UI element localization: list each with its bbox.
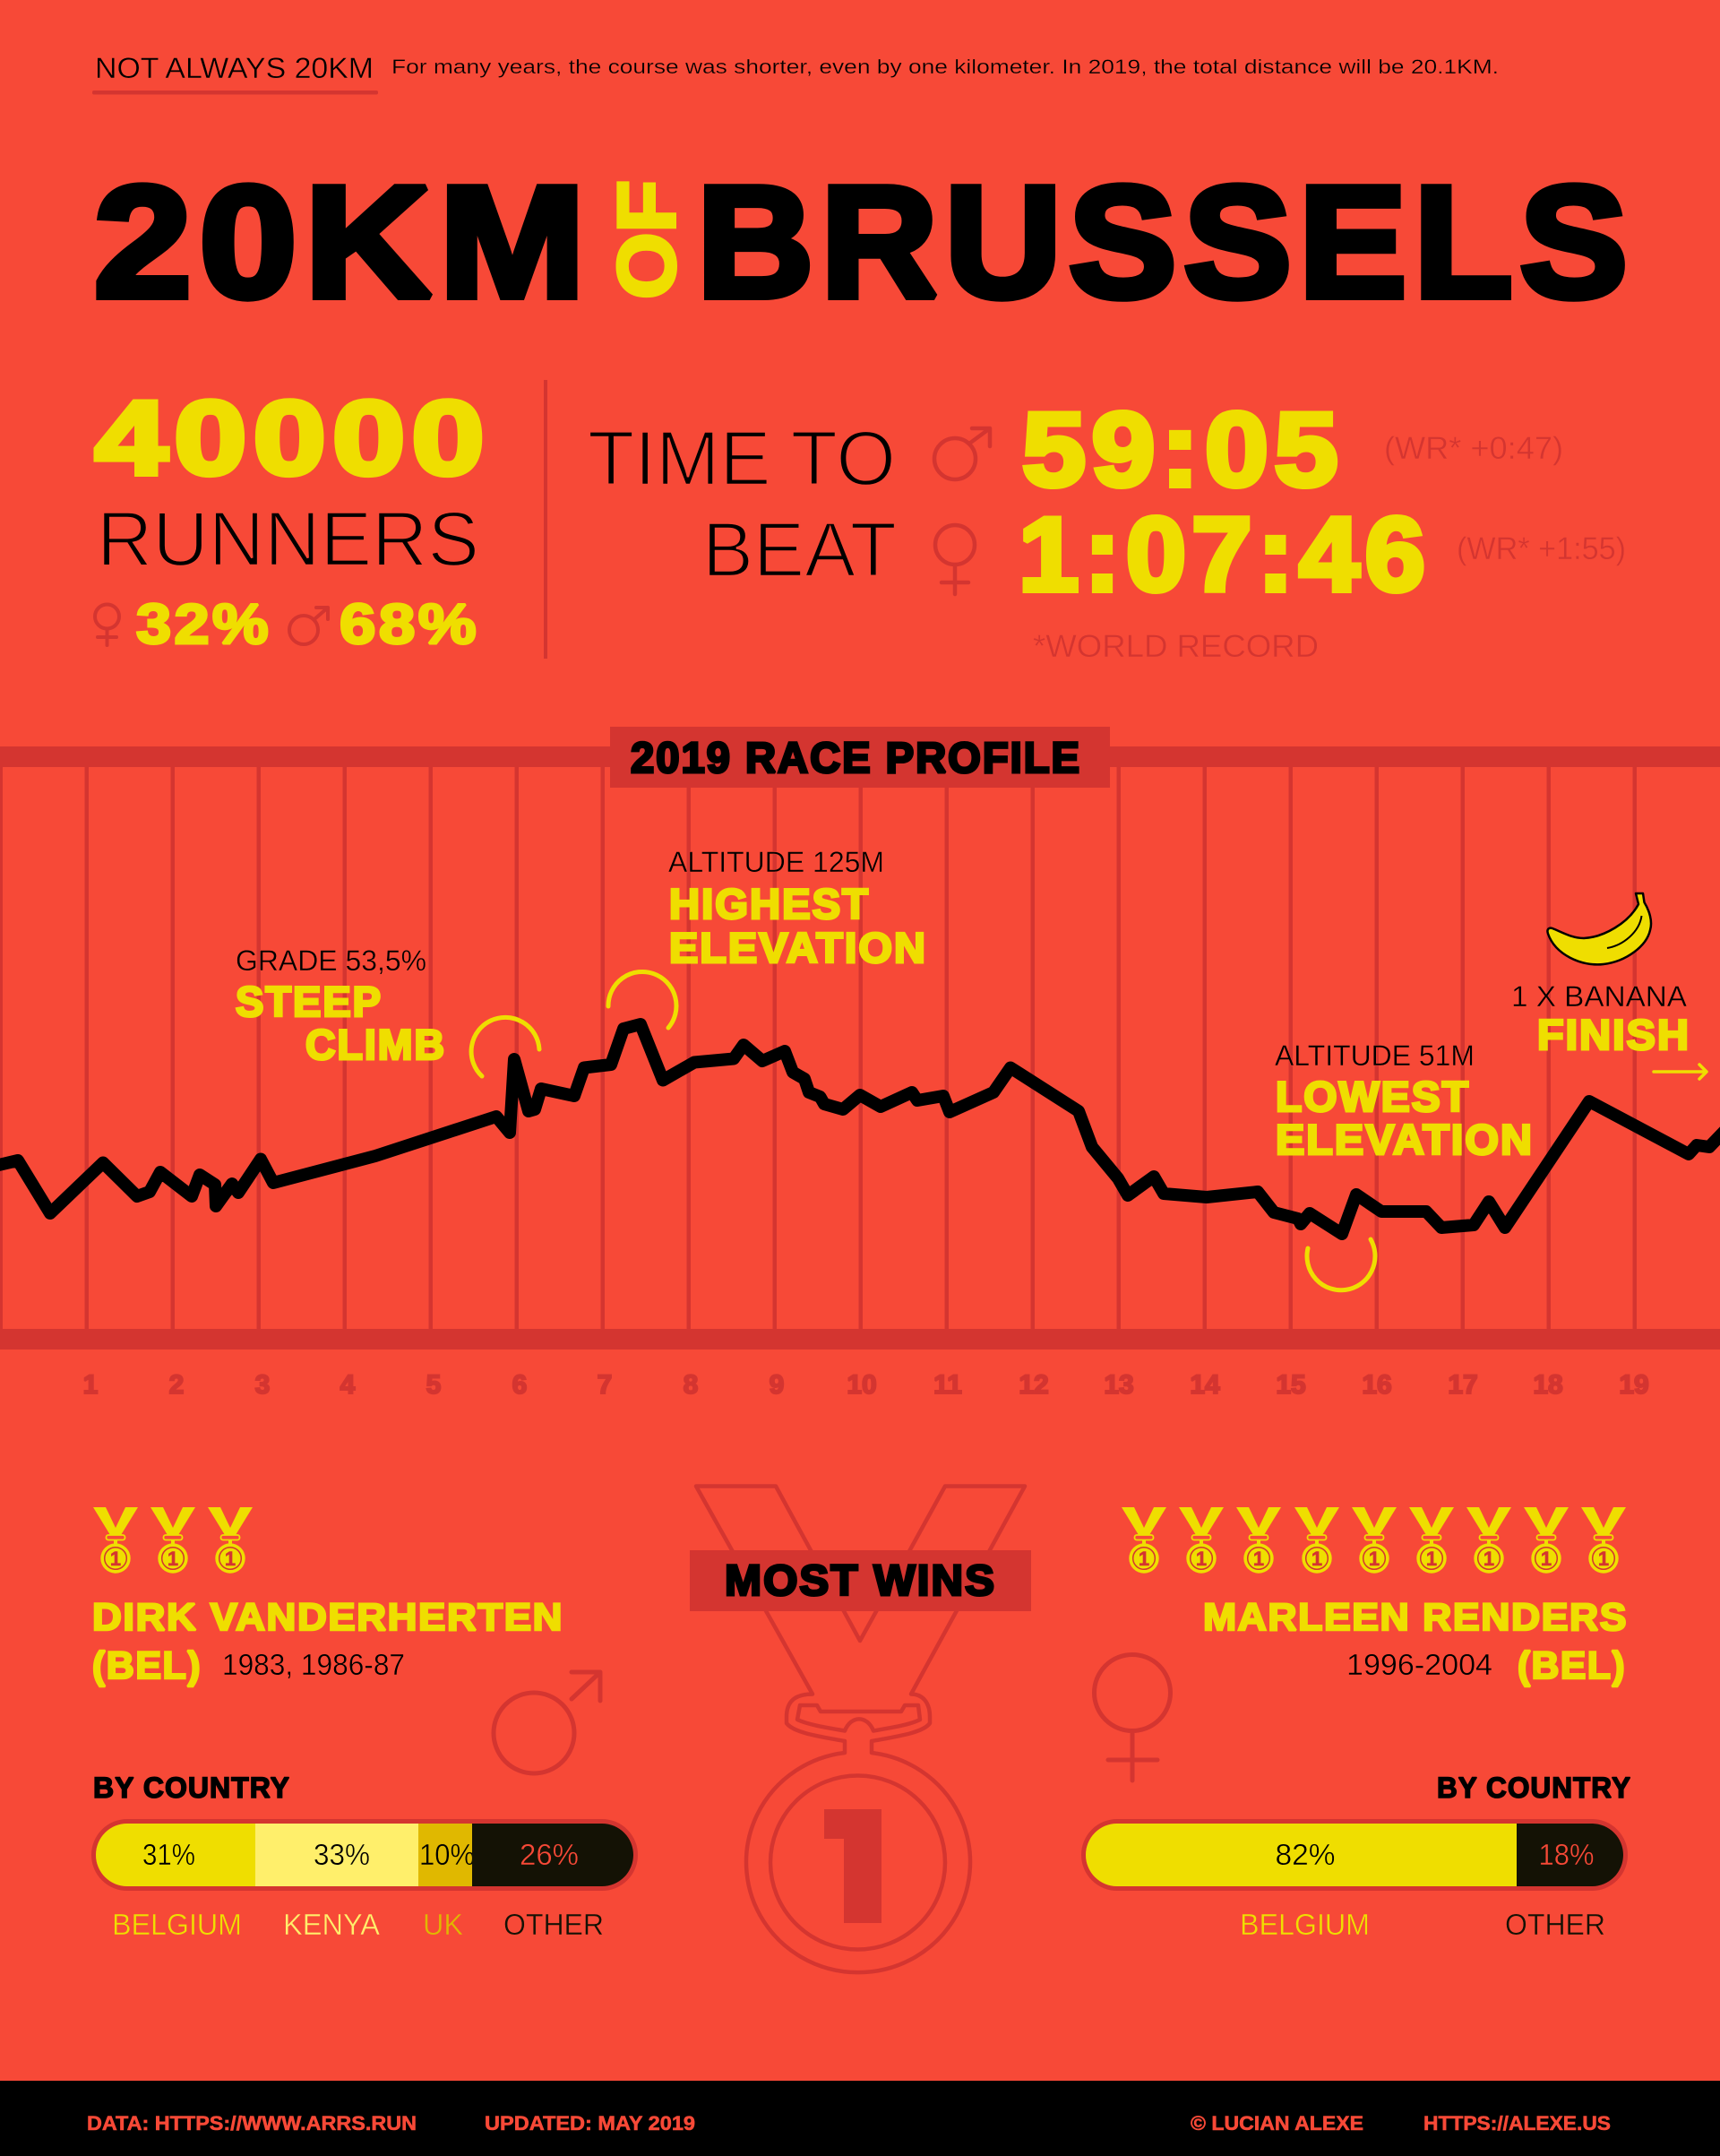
- men bar legend: UK: [423, 1908, 463, 1941]
- medals: 3 wins: 1: [168, 1548, 178, 1570]
- kilometre axis labels: 7: [598, 1370, 612, 1400]
- men bar legend: [112, 1908, 604, 1941]
- panel: runners: [95, 379, 491, 656]
- time to label: TIME TO: [588, 416, 896, 502]
- male record gap: (WR* +0:47): [1384, 431, 1563, 466]
- medals: 9 wins: 1: [1139, 1548, 1149, 1570]
- kilometre axis labels: 11: [933, 1370, 962, 1400]
- medals: 3 wins: 1: [110, 1548, 121, 1570]
- title word BRUSSELS: BRUSSELS: [697, 153, 1635, 331]
- icon: banana: [1547, 893, 1651, 964]
- medals: 9 wins: 1: [1541, 1548, 1552, 1570]
- callout: finish: FINISH: [1537, 1011, 1690, 1058]
- elevation line: [0, 1024, 1720, 1234]
- title word OF: OF: [602, 180, 692, 299]
- kilometre axis labels: 14: [1190, 1370, 1220, 1400]
- chart frame top: [0, 746, 1720, 767]
- circle marker: steep climb: [471, 1017, 539, 1076]
- men country bar: 31%: [142, 1838, 195, 1871]
- world record footnote: *WORLD RECORD: [1033, 629, 1319, 664]
- medals: 9 wins: [1122, 1507, 1626, 1574]
- men country bar: 33%: [314, 1838, 370, 1871]
- site: HTTPS://ALEXE.US: [1423, 2112, 1611, 2134]
- callout: steep climb: GRADE 53,5%: [236, 944, 426, 977]
- kilometre axis labels: 1: [83, 1370, 98, 1400]
- icon: female small: [95, 604, 119, 645]
- callout: lowest elevation: LOWEST: [1276, 1073, 1470, 1120]
- panel: men: [92, 1507, 636, 1941]
- medal clasp: [797, 1705, 920, 1731]
- men winner years: 1983, 1986-87: [222, 1648, 405, 1681]
- medals: 3 wins: 1: [225, 1548, 236, 1570]
- callout: lowest elevation: [1275, 1039, 1534, 1163]
- title: [94, 153, 1635, 331]
- callout: finish: [1511, 980, 1690, 1058]
- women winner country: (BEL): [1518, 1644, 1626, 1687]
- icon: female: [935, 525, 975, 594]
- women country bar: 82%: [1276, 1838, 1335, 1871]
- medals: 9 wins: 1: [1426, 1548, 1437, 1570]
- icon: male small: [289, 608, 328, 644]
- kilometre axis labels: 18: [1533, 1370, 1563, 1400]
- author: © LUCIAN ALEXE: [1191, 2112, 1363, 2134]
- kilometre axis labels: 17: [1448, 1370, 1478, 1400]
- kilometre axis labels: 12: [1019, 1370, 1049, 1400]
- medals: 9 wins: 1: [1253, 1548, 1264, 1570]
- medal inner ring: [770, 1776, 945, 1950]
- medals: 9 wins: 1: [1196, 1548, 1207, 1570]
- kilometre axis labels: 6: [512, 1370, 527, 1400]
- kilometre axis labels: 19: [1619, 1370, 1649, 1400]
- medal outline: [696, 1486, 1025, 1972]
- heading: most wins: MOST WINS: [725, 1557, 996, 1605]
- men bar legend: KENYA: [283, 1908, 380, 1941]
- women bar legend: BELGIUM: [1240, 1908, 1370, 1941]
- men by country heading: BY COUNTRY: [93, 1772, 290, 1804]
- women by country heading: BY COUNTRY: [1437, 1772, 1631, 1804]
- kilometre axis labels: 2: [169, 1370, 184, 1400]
- updated: UPDATED: MAY 2019: [485, 2112, 695, 2134]
- men bar legend: OTHER: [503, 1908, 604, 1941]
- chart title: 2019 RACE PROFILE: [631, 735, 1081, 782]
- circle marker: lowest: [1307, 1239, 1375, 1290]
- men winner name: DIRK VANDERHERTEN: [92, 1596, 563, 1639]
- beat label: BEAT: [702, 507, 897, 593]
- callout: steep climb: STEEP: [236, 978, 383, 1025]
- women country bar: 18%: [1539, 1838, 1595, 1871]
- callout: lowest elevation: ELEVATION: [1276, 1116, 1534, 1163]
- kilometre axis labels: 16: [1362, 1370, 1392, 1400]
- callout: highest elevation: ALTITUDE 125M: [668, 846, 884, 878]
- men country bar: 26%: [520, 1838, 579, 1871]
- icon: big female: [1095, 1654, 1170, 1781]
- kilometre axis labels: 9: [770, 1370, 784, 1400]
- callout: finish: 1 X BANANA: [1511, 980, 1688, 1013]
- women bar legend: OTHER: [1505, 1908, 1605, 1941]
- men bar legend: BELGIUM: [112, 1908, 242, 1941]
- medals: 9 wins: 1: [1598, 1548, 1609, 1570]
- callout: lowest elevation: ALTITUDE 51M: [1275, 1039, 1475, 1072]
- female time: 1:07:46: [1019, 496, 1431, 613]
- heading: most wins: [690, 1550, 1031, 1611]
- kilometre axis labels: 5: [426, 1370, 441, 1400]
- medals: 3 wins: [93, 1507, 253, 1574]
- men winner country: (BEL): [92, 1644, 202, 1687]
- circle marker: highest: [608, 971, 676, 1028]
- icon: male: [934, 428, 990, 479]
- medals: 9 wins: 1: [1369, 1548, 1380, 1570]
- note heading: NOT ALWAYS 20KM: [95, 52, 374, 84]
- callout: highest elevation: HIGHEST: [669, 880, 870, 927]
- kilometre axis labels: 4: [340, 1370, 356, 1400]
- women country bar: [1084, 1821, 1625, 1889]
- kilometre axis labels: [83, 1370, 1649, 1400]
- runners label: RUNNERS: [97, 496, 479, 582]
- callout: highest elevation: [668, 846, 927, 971]
- panel: women: [1084, 1507, 1631, 1941]
- kilometre axis labels: 3: [255, 1370, 270, 1400]
- callout: highest elevation: ELEVATION: [669, 924, 927, 971]
- data source: DATA: HTTPS://WWW.ARRS.RUN: [87, 2112, 417, 2134]
- callout: steep climb: CLIMB: [305, 1021, 446, 1068]
- male share: 68%: [340, 593, 479, 656]
- women bar legend: [1240, 1908, 1605, 1941]
- footer: [0, 2081, 1720, 2156]
- male time: 59:05: [1022, 391, 1344, 508]
- women winner name: MARLEEN RENDERS: [1203, 1596, 1628, 1639]
- chart frame bottom: [0, 1329, 1720, 1350]
- men country bar: 10%: [419, 1838, 475, 1871]
- chart: race profile: [0, 727, 1720, 1400]
- note text: For many years, the course was shorter, even by one kilometer. In 2019, the total distance will be 20.1KM.: [391, 56, 1499, 78]
- kilometre axis labels: 15: [1276, 1370, 1306, 1400]
- runners count: 40000: [95, 379, 491, 496]
- women winner years: 1996-2004: [1346, 1648, 1492, 1681]
- medals: 9 wins: 1: [1484, 1548, 1494, 1570]
- title word 20KM: 20KM: [94, 153, 593, 331]
- top note: [92, 52, 1499, 95]
- divider: [544, 380, 547, 659]
- female share: 32%: [136, 593, 271, 656]
- callout: steep climb: [236, 944, 446, 1068]
- men country bar: [93, 1821, 636, 1889]
- medal numeral: 1: [793, 1755, 913, 1995]
- note underline: [92, 91, 378, 95]
- kilometre axis labels: 13: [1104, 1370, 1134, 1400]
- panel: time to beat: [588, 391, 1626, 664]
- medals: 9 wins: 1: [1312, 1548, 1322, 1570]
- female record gap: (WR* +1:55): [1457, 531, 1626, 566]
- kilometre axis labels: 8: [684, 1370, 698, 1400]
- icon: big male: [494, 1672, 600, 1773]
- icon: big medal: [696, 1486, 1025, 1995]
- arrow: finish: [1654, 1065, 1707, 1079]
- kilometre axis labels: 10: [847, 1370, 877, 1400]
